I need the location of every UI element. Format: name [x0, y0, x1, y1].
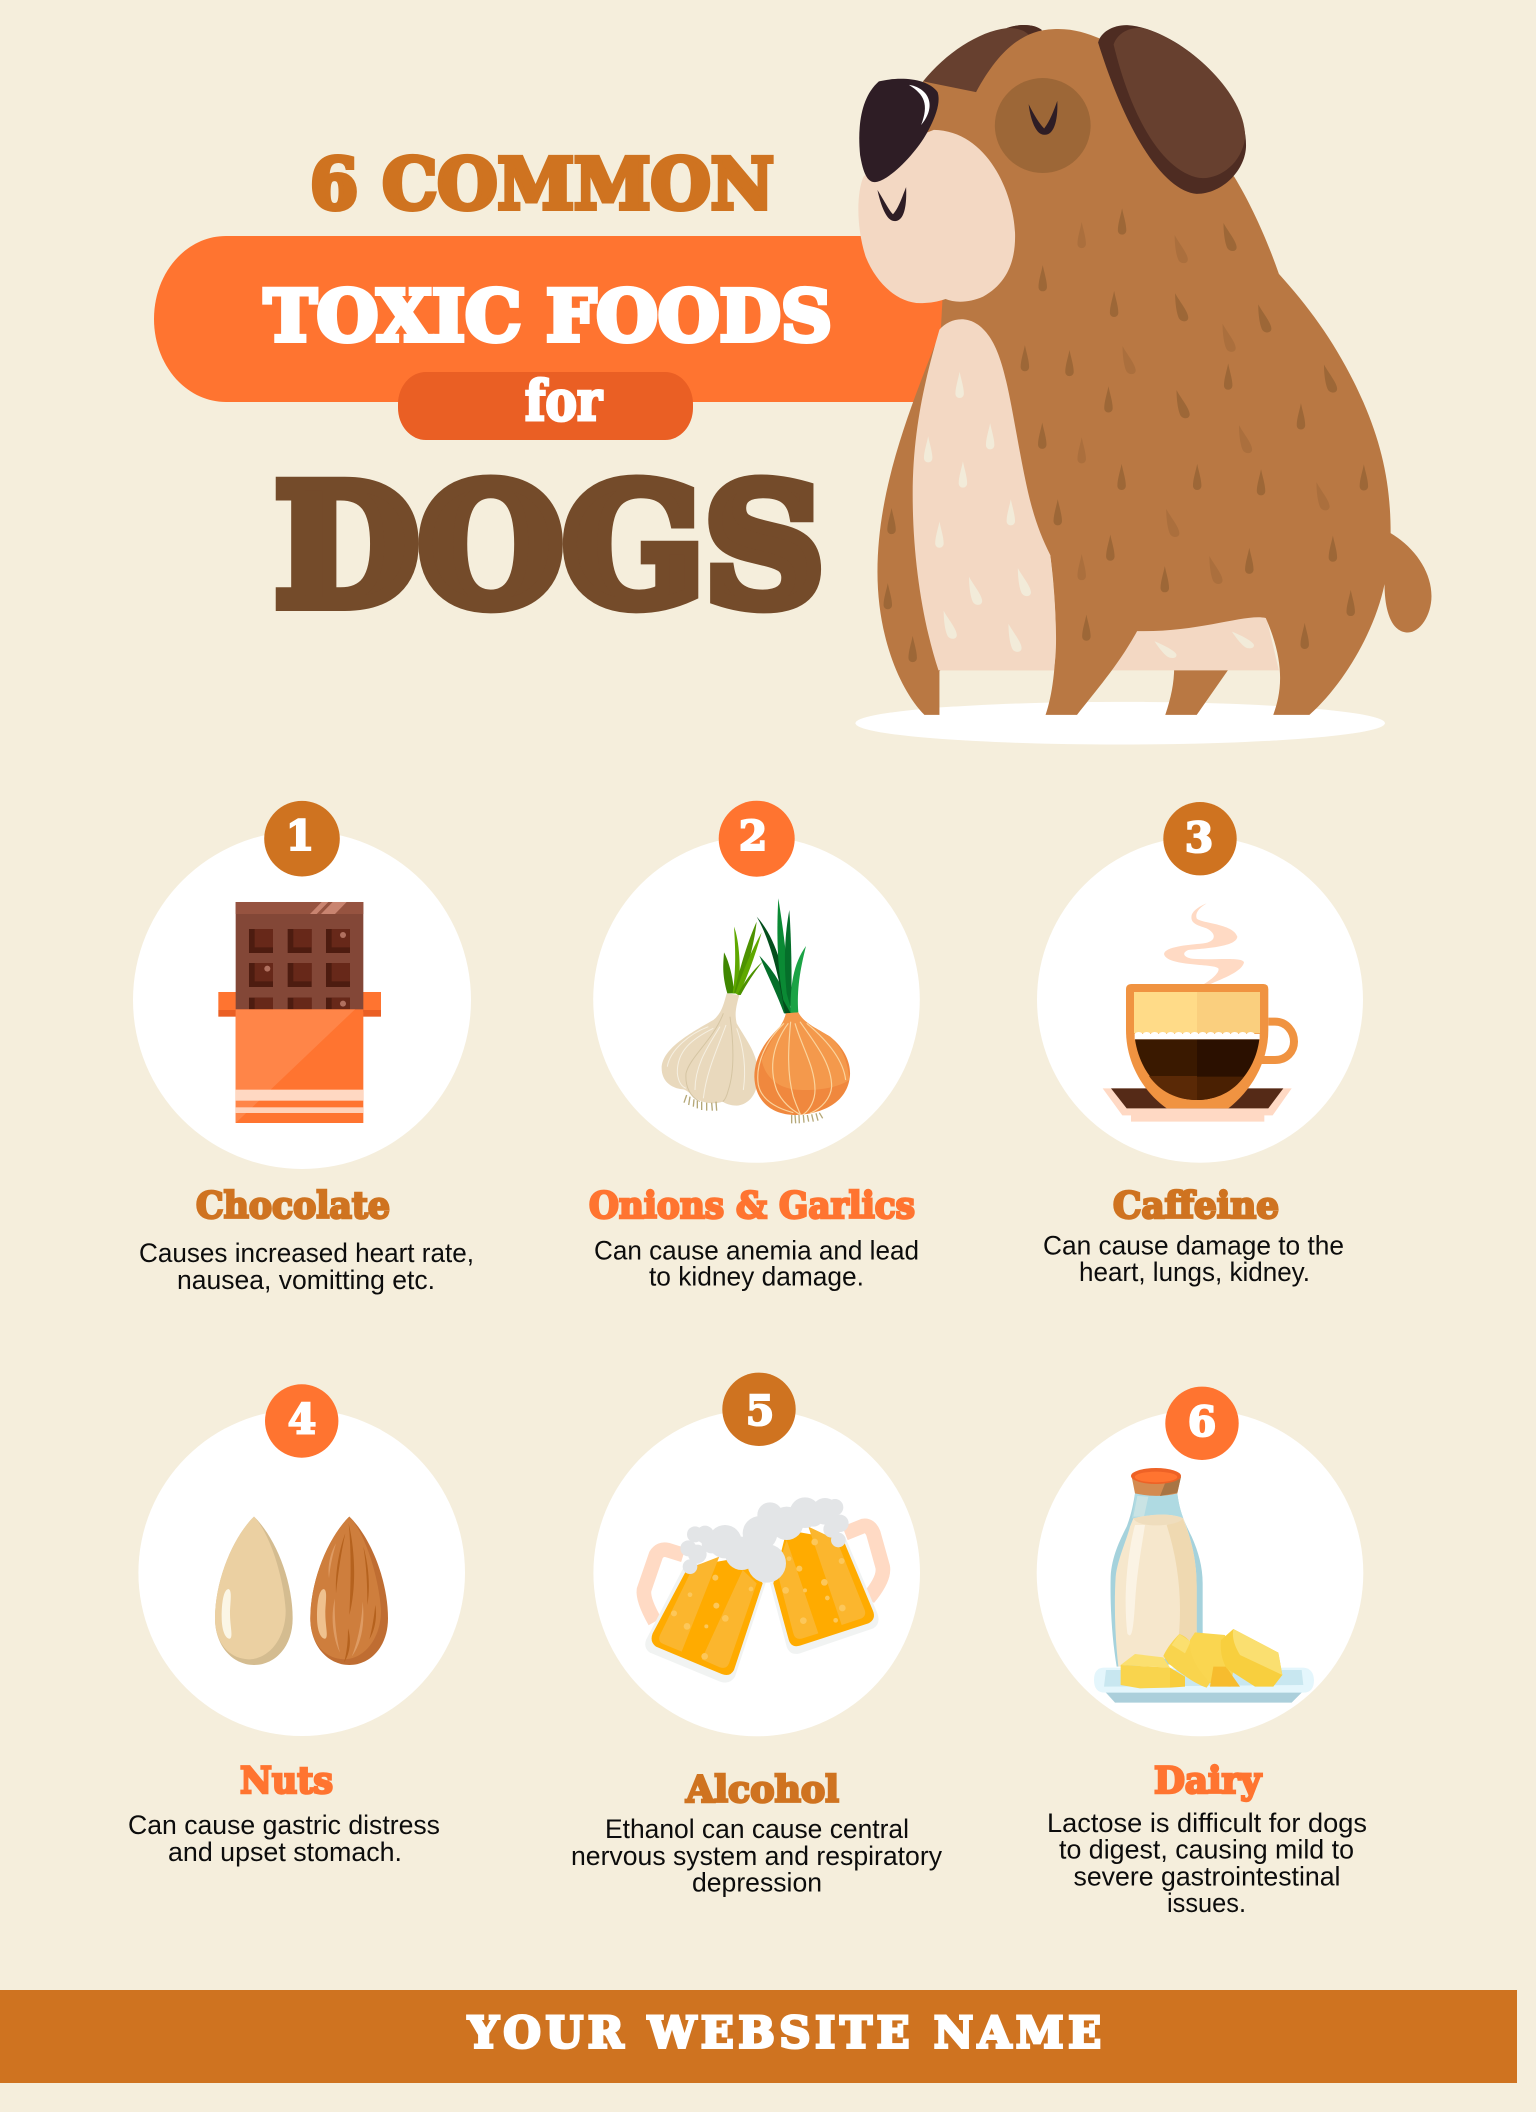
description: to digest, causing mild to [1059, 1835, 1354, 1865]
panel: chocolate [133, 801, 474, 1295]
white circle [593, 836, 920, 1163]
heading: dairy: Dairy [1154, 1760, 1262, 1802]
number badge 5 [722, 1373, 796, 1446]
icon: almonds [215, 1517, 388, 1665]
description: heart, lungs, kidney. [1079, 1257, 1310, 1287]
heading: for: for [525, 368, 603, 433]
description: Causes increased heart rate, [139, 1238, 474, 1268]
white circle [1037, 837, 1363, 1163]
white circle [138, 1409, 465, 1736]
right mug [770, 1527, 879, 1654]
website name: YOUR WEBSITE NAME [467, 2008, 1101, 2058]
description: depression [692, 1868, 822, 1898]
belly underside [939, 582, 1279, 670]
description: issues. [1167, 1888, 1246, 1918]
heading: alcohol: Alcohol [685, 1769, 839, 1811]
onion greens [757, 898, 806, 1013]
fur marks dark [884, 208, 1368, 662]
orange banner [154, 236, 1000, 402]
description [571, 1814, 943, 1898]
icon: beer mugs [644, 1497, 883, 1683]
muzzle [858, 130, 1015, 303]
icon: coffee cup [1103, 903, 1294, 1122]
left mug [645, 1557, 767, 1683]
coffee [1135, 1039, 1197, 1100]
closed eye far [1029, 101, 1057, 135]
onion roots [792, 1113, 823, 1123]
description: nausea, vomitting etc. [177, 1265, 435, 1295]
number badge 5: 5 [746, 1387, 774, 1435]
heading: dogs: DOGS [275, 449, 824, 643]
garlic roots [684, 1095, 717, 1111]
description: severe gastrointestinal [1074, 1862, 1340, 1892]
nose [859, 79, 939, 182]
garlic bulb [662, 993, 758, 1106]
number badge 6 [1165, 1387, 1239, 1460]
description: nervous system and respiratory [571, 1841, 943, 1871]
description: Lactose is difficult for dogs [1047, 1808, 1367, 1838]
handles [644, 1550, 683, 1622]
cup [1126, 984, 1268, 1108]
plate [1105, 1692, 1303, 1703]
heading: caffeine: Caffeine [1113, 1185, 1279, 1227]
description: Can cause damage to the [1043, 1230, 1344, 1260]
foam [1135, 1034, 1260, 1039]
garlic greens [723, 922, 763, 995]
description: and upset stomach. [168, 1837, 402, 1867]
blanched almond [215, 1517, 293, 1665]
panel: alcohol [571, 1373, 943, 1898]
body [877, 29, 1431, 715]
number badge 4: 4 [288, 1396, 316, 1444]
description: Ethanol can cause central [605, 1814, 909, 1844]
closed eye near [877, 187, 906, 221]
foam [680, 1497, 849, 1583]
ground shadow [855, 702, 1385, 744]
far leg [1165, 666, 1231, 715]
panel: nuts [128, 1384, 465, 1867]
description: Can cause gastric distress [128, 1810, 440, 1840]
description [128, 1810, 440, 1867]
description [594, 1236, 919, 1292]
brown almond [310, 1517, 388, 1665]
number badge 4 [265, 1384, 338, 1458]
number badge 3 [1163, 802, 1237, 875]
bubbles [671, 1539, 846, 1660]
butter slices [1121, 1629, 1282, 1688]
white circle [593, 1410, 920, 1736]
description: Can cause anemia and lead [594, 1236, 919, 1266]
number badge 2: 2 [739, 812, 767, 860]
chest [913, 319, 1056, 670]
panel: onions and garlics [589, 801, 920, 1292]
white circle [133, 831, 471, 1169]
milk layer [1134, 992, 1197, 1033]
heading: chocolate: Chocolate [196, 1185, 390, 1227]
nose highlight [909, 85, 930, 125]
number badge 1 [264, 801, 340, 876]
number badge 1: 1 [286, 812, 314, 860]
fur marks light [1077, 222, 1330, 584]
description [1047, 1808, 1367, 1918]
steam [1164, 903, 1244, 984]
description [139, 1238, 474, 1295]
title block [154, 142, 1000, 643]
icon: chocolate bar [218, 902, 381, 1123]
fur marks cream [924, 372, 1254, 658]
eye patch [995, 78, 1091, 173]
heading: 6 common: 6 COMMON [310, 142, 774, 226]
number badge 3: 3 [1185, 814, 1213, 862]
cap [1132, 1477, 1181, 1496]
for pill [398, 372, 693, 440]
illustration: dog [855, 25, 1431, 744]
far ear [923, 25, 1042, 95]
saucer [1103, 1088, 1292, 1122]
onion bulb [754, 1012, 850, 1115]
panel: caffeine [1037, 802, 1363, 1287]
description: to kidney damage. [649, 1262, 864, 1292]
heading: onions and garlics: Onions & Garlics [589, 1185, 915, 1227]
near ear [1098, 25, 1246, 194]
heading: nuts: Nuts [240, 1760, 333, 1802]
number badge 6: 6 [1188, 1398, 1216, 1446]
icon: garlic and onion [662, 898, 850, 1123]
milk [1115, 1515, 1197, 1667]
footer bar [0, 1990, 1517, 2083]
number badge 2 [719, 801, 795, 877]
bottle glass [1111, 1493, 1203, 1667]
description [1043, 1230, 1344, 1287]
white circle [1037, 1410, 1363, 1736]
panel: dairy [1037, 1387, 1367, 1918]
handle [1260, 1022, 1294, 1060]
heading: toxic foods: TOXIC FOODS [264, 274, 832, 358]
icon: milk bottle and butter [1094, 1468, 1314, 1703]
